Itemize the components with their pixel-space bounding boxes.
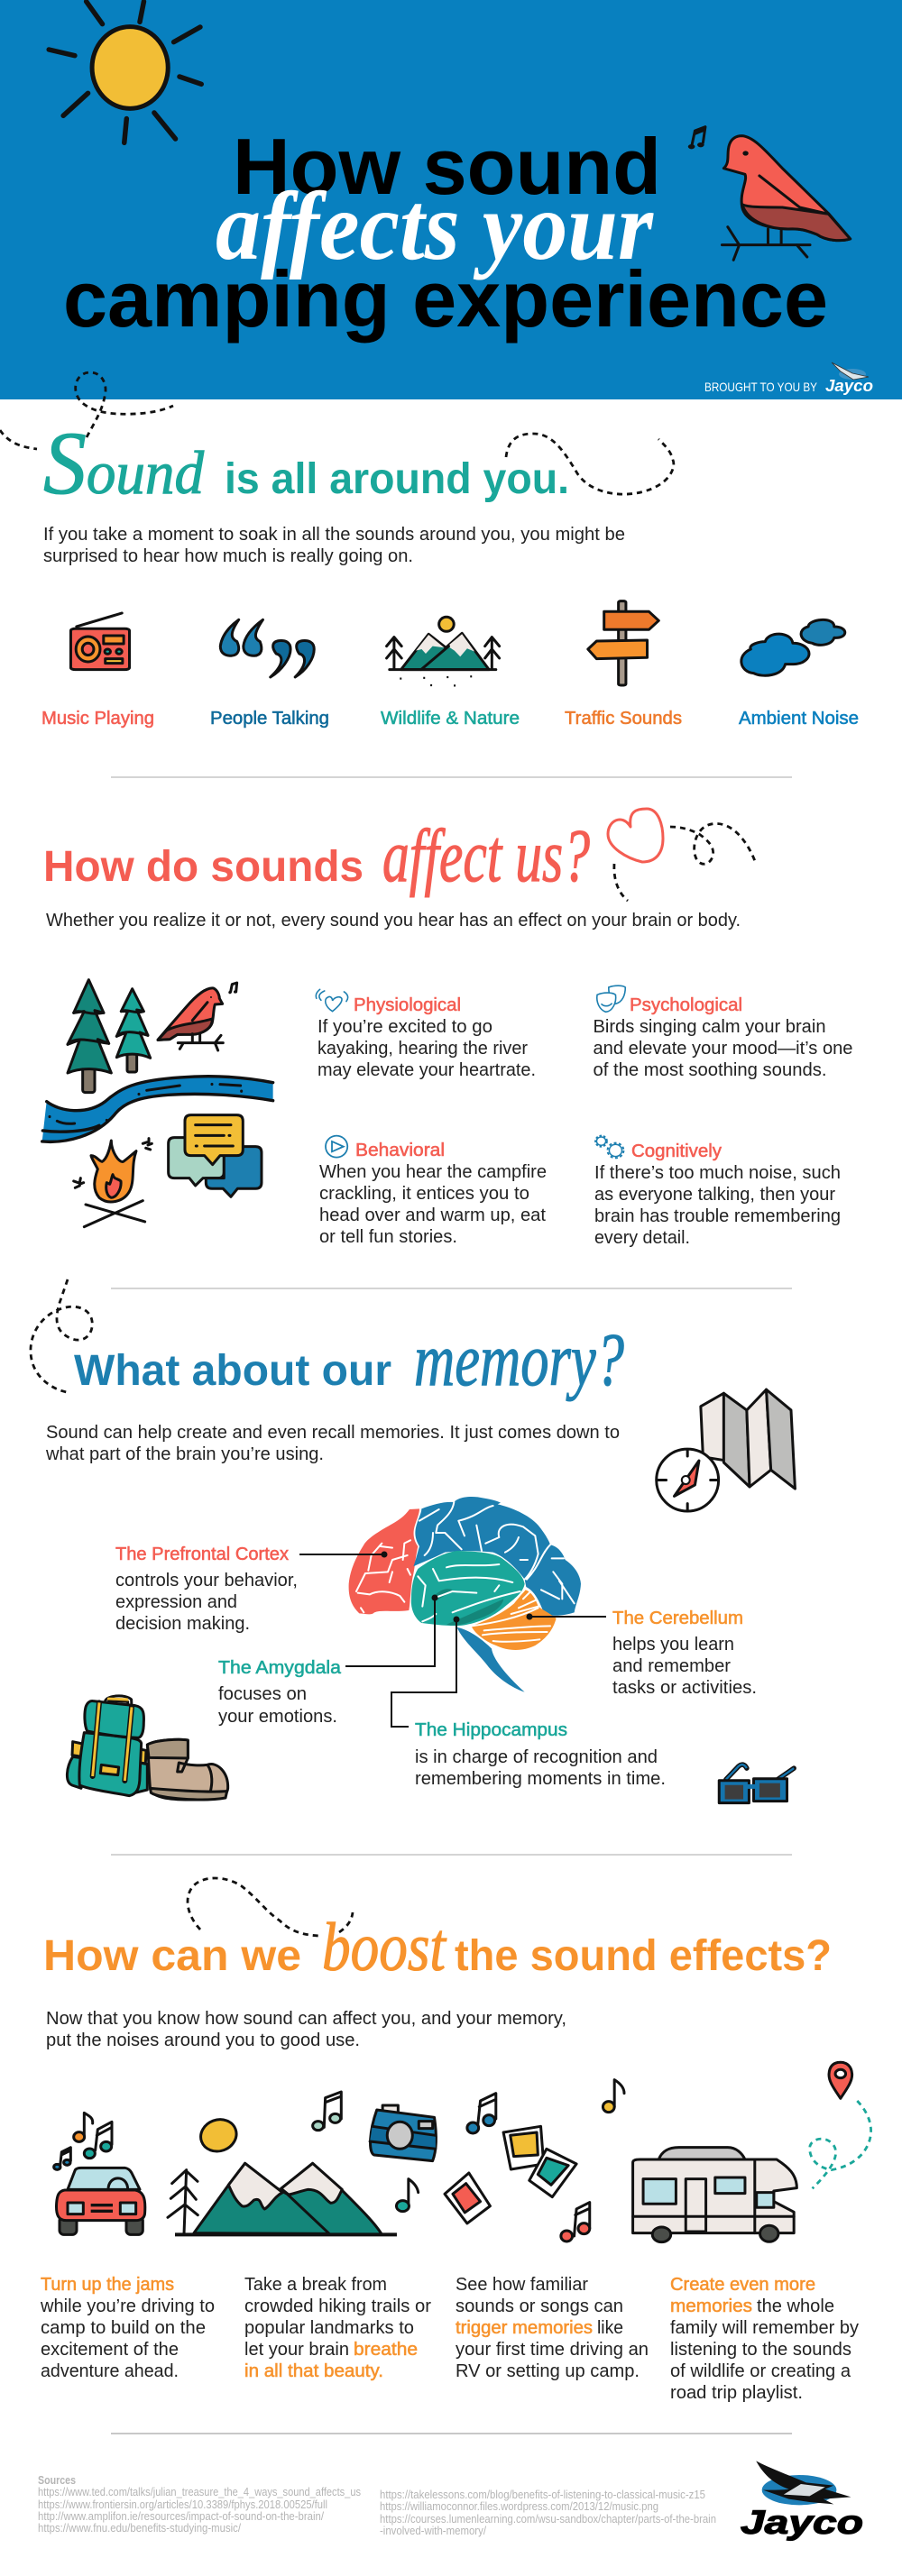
icon: quotation marks [220, 619, 314, 677]
tip: familiar sounds: like [597, 2318, 623, 2338]
tip: create more memories: Create even more [670, 2275, 815, 2295]
label: hippocampus: is in charge of recognition and [415, 1747, 658, 1767]
tip: turn up the jams: while you’re driving to [40, 2296, 215, 2316]
tip: take a break: popular landmarks to [244, 2318, 414, 2338]
leader lines [299, 1554, 606, 1727]
tip: turn up the jams: adventure ahead. [41, 2361, 179, 2381]
item: cognitively: If there’s too much noise, such [594, 1163, 841, 1183]
heading: boost [322, 1910, 447, 1985]
icon: music notes middle [396, 2094, 496, 2212]
tip: familiar sounds: sounds or songs can [456, 2296, 623, 2316]
intro text: surprised to hear how much is really going on. [43, 546, 413, 566]
icon: road sign [588, 601, 658, 685]
icon labels: Wildlife & Nature [381, 709, 520, 729]
label: hippocampus: remembering moments in time. [415, 1769, 666, 1789]
icon: heartbeat [316, 989, 348, 1012]
icon: clouds [741, 619, 845, 675]
heading: How can we [43, 1932, 301, 1980]
panel: how can we boost the sound effects [40, 1878, 871, 2403]
group: car, notes, sun, tree and mountains [54, 2092, 397, 2234]
item: behavioral: When you hear the campfire [319, 1162, 547, 1182]
intro text: Sound can help create and even recall memories. It just comes down to [46, 1423, 620, 1443]
icon labels: People Talking [210, 709, 329, 729]
illustration: forest, river and campfire [42, 980, 273, 1227]
icon: heart [608, 809, 663, 862]
group: camera, photos, notes, motorhome and pin [370, 2062, 871, 2242]
heading [43, 814, 590, 898]
intro text [43, 525, 625, 566]
label: cerebellum: tasks or activities. [612, 1678, 757, 1698]
item: behavioral: or tell fun stories. [319, 1227, 457, 1247]
tip: create more memories [670, 2275, 859, 2403]
panel: sources: https://takelessons.com/blog/benefits-of-listening-to-classical-music-z15 [380, 2489, 705, 2501]
intro text: what part of the brain you’re using. [45, 1444, 324, 1464]
illustration: road trip [54, 2062, 871, 2242]
item: behavioral [319, 1136, 547, 1247]
icon: photos [445, 2126, 576, 2223]
item: physiological: may elevate your heartrate. [318, 1060, 536, 1080]
label: prefrontal cortex: controls your behavior, [115, 1571, 298, 1591]
label: prefrontal cortex: expression and [115, 1592, 237, 1612]
icon labels: Traffic Sounds [565, 709, 682, 729]
item: behavioral: head over and warm up, eat [319, 1205, 546, 1225]
item: cognitively [594, 1136, 841, 1248]
icon: mountains [175, 2163, 397, 2234]
tip: take a break: let your brain [244, 2340, 349, 2360]
icon: location pin and trail [810, 2062, 871, 2188]
panel: sources: https://www.frontiersin.org/articles/10.3389/fphys.2018.00525/full [38, 2498, 327, 2511]
tip: create more memories: the whole [757, 2296, 834, 2316]
item: psychological: Psychological [630, 995, 742, 1015]
icon labels: Ambient Noise [739, 709, 859, 729]
icon: tree [168, 2170, 198, 2234]
panel: sources: Sources [38, 2474, 76, 2487]
tree large [68, 980, 111, 1093]
chart: brain diagram [299, 1497, 606, 1727]
panel: sources [38, 2474, 716, 2537]
heading: the sound effects? [455, 1932, 832, 1980]
icon: motorhome [633, 2148, 796, 2242]
tip: create more memories: memories [670, 2296, 752, 2316]
label: cerebellum: and remember [612, 1656, 731, 1676]
item: behavioral: Behavioral [355, 1141, 445, 1160]
tip: turn up the jams: Turn up the jams [41, 2275, 174, 2295]
item: psychological [594, 985, 853, 1080]
icon: backpack and boots [67, 1696, 228, 1800]
dashed trail [31, 1279, 92, 1392]
panel: sources: https://courses.lumenlearning.com/wsu-sandbox/chapter/parts-of-the-brain [380, 2513, 716, 2526]
tip: create more memories: family will remember by [670, 2318, 859, 2338]
tip: familiar sounds: RV or setting up camp. [456, 2361, 640, 2381]
item: cognitively: every detail. [594, 1228, 690, 1248]
icon: music notes by car [54, 2113, 112, 2169]
panel: sources: -involved-with-memory/ [380, 2525, 486, 2537]
tip: familiar sounds [456, 2275, 649, 2381]
panel: sound is all around you [0, 372, 859, 729]
tip: turn up the jams [40, 2275, 215, 2381]
intro text: Whether you realize it or not, every sound you hear has an effect on your brain or body. [46, 911, 741, 930]
label: amygdala: The Amygdala [218, 1658, 342, 1678]
heading: affect us? [382, 814, 590, 898]
icon: sun [49, 2, 201, 142]
intro text: put the noises around you to good use. [46, 2031, 360, 2050]
panel: sources: https://williamoconnor.files.wordpress.com/2013/12/music.png [380, 2500, 658, 2513]
item: physiological: kayaking, hearing the river [318, 1039, 528, 1059]
dashed trail [188, 1878, 353, 1936]
sponsor credit: BROUGHT TO YOU BY [704, 380, 818, 394]
dashed trail left [0, 372, 173, 449]
tip: take a break: breathe [354, 2340, 418, 2360]
title line 3: camping experience [63, 254, 828, 344]
tip: turn up the jams: camp to build on the [41, 2318, 206, 2338]
icon: map and compass [657, 1389, 795, 1511]
heading: How do sounds [43, 843, 364, 891]
brain stem [457, 1627, 525, 1692]
tree small [116, 989, 151, 1072]
icon: radio [70, 613, 130, 670]
prefrontal cortex region [349, 1508, 419, 1614]
item: cognitively: as everyone talking, then your [594, 1185, 835, 1205]
heading [43, 1910, 832, 1985]
dashed trail right [506, 434, 674, 494]
label: amygdala: your emotions. [218, 1707, 337, 1727]
tip: familiar sounds: trigger memories [456, 2318, 593, 2338]
river [42, 1077, 273, 1141]
icon: light green notes [313, 2092, 341, 2131]
tip: create more memories: road trip playlist. [670, 2383, 803, 2403]
item: physiological: If you’re excited to go [318, 1017, 492, 1037]
panel: how do sounds affect us [42, 809, 852, 1248]
panel: what about our memory [31, 1279, 795, 1803]
item: physiological [316, 989, 536, 1080]
heading [74, 1318, 624, 1402]
tip: create more memories: of wildlife or creating a [670, 2361, 851, 2381]
intro text [45, 1423, 620, 1464]
cerebellum region [472, 1590, 557, 1650]
sponsor credit: Jayco [825, 377, 873, 395]
label: prefrontal cortex: The Prefrontal Cortex [115, 1545, 289, 1564]
title line 1: How sound [233, 122, 661, 211]
heading [43, 413, 569, 513]
item: physiological: Physiological [354, 995, 461, 1015]
label: hippocampus: The Hippocampus [415, 1720, 567, 1740]
label: amygdala [218, 1658, 342, 1727]
dashed trail [614, 823, 755, 901]
icon labels [41, 709, 859, 729]
icon: sun [197, 2114, 241, 2156]
heading: is all around you. [225, 455, 569, 503]
icon: theatre masks [597, 985, 625, 1012]
item: cognitively: brain has trouble remembering [594, 1206, 841, 1226]
label: amygdala: focuses on [218, 1684, 307, 1704]
icon: gears [595, 1136, 623, 1158]
campfire [74, 1139, 152, 1227]
icon labels: Music Playing [41, 709, 154, 729]
intro text: Now that you know how sound can affect you, and your memory, [46, 2009, 566, 2029]
tip: take a break: crowded hiking trails or [244, 2296, 431, 2316]
tip: take a break: Take a break from [244, 2275, 387, 2295]
item: behavioral: crackling, it entices you to [319, 1184, 529, 1204]
label: cerebellum [612, 1609, 757, 1698]
panel: sources: https://www.fnu.edu/benefits-studying-music/ [38, 2522, 241, 2535]
icon: singing bird [688, 127, 851, 260]
item: psychological: of the most soothing sounds. [594, 1060, 826, 1080]
limbic region [411, 1551, 525, 1626]
item: cognitively: Cognitively [631, 1141, 722, 1161]
speech bubbles [169, 1115, 262, 1196]
tip: take a break: in all that beauty. [244, 2361, 383, 2381]
icon: Jayco bird [756, 2461, 851, 2505]
icon: sunglasses [719, 1765, 794, 1803]
icon: wildlife and nature [387, 617, 500, 686]
icon: music notes right [561, 2080, 624, 2241]
tip: take a break [244, 2275, 431, 2381]
intro text: If you take a moment to soak in all the sounds around you, you might be [43, 525, 625, 545]
heading: What about our [74, 1347, 391, 1395]
logo: Jayco: Jayco [741, 2504, 863, 2541]
label: prefrontal cortex [115, 1545, 298, 1634]
panel: header banner [0, 0, 902, 399]
panel: sources: http://www.amplifon.ie/resources/impact-of-sound-on-the-brain/ [38, 2510, 324, 2523]
sponsor credit [704, 362, 873, 395]
label: hippocampus [415, 1720, 666, 1789]
intro text [46, 2009, 566, 2050]
label: cerebellum: helps you learn [612, 1635, 734, 1655]
icon: play button [326, 1136, 347, 1158]
heading: memory? [414, 1318, 624, 1402]
bird on branch [158, 983, 237, 1050]
heading: Sound [43, 413, 205, 513]
logo: Jayco [741, 2461, 863, 2541]
title script line: affects your [216, 173, 654, 280]
icon: car [56, 2168, 145, 2234]
tip: familiar sounds: your first time driving an [456, 2340, 649, 2360]
item: psychological: and elevate your mood—it’s one [594, 1039, 853, 1059]
panel: sources: https://www.ted.com/talks/julian_treasure_the_4_ways_sound_affects_us [38, 2486, 361, 2498]
tip: familiar sounds: See how familiar [456, 2275, 588, 2295]
icon: camera [370, 2105, 436, 2161]
parietal and temporal region [413, 1497, 581, 1616]
tip: turn up the jams: excitement of the [41, 2340, 179, 2360]
label: prefrontal cortex: decision making. [115, 1614, 250, 1634]
tip: create more memories: listening to the sounds [670, 2340, 851, 2360]
item: psychological: Birds singing calm your brain [594, 1017, 826, 1037]
label: cerebellum: The Cerebellum [612, 1609, 743, 1628]
